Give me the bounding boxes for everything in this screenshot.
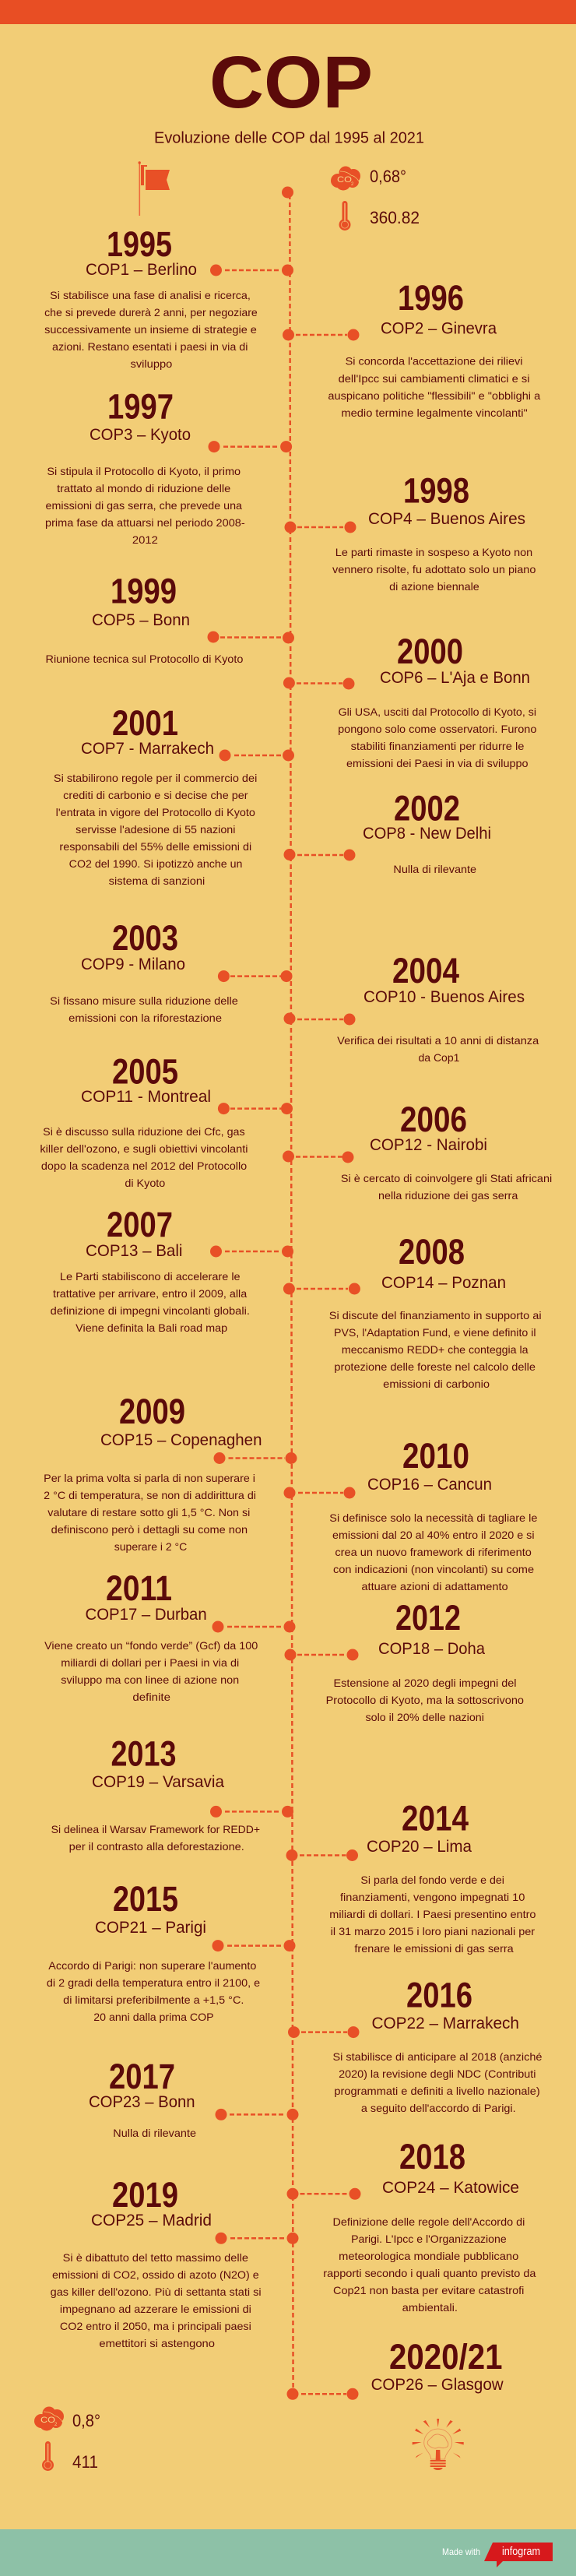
event 2006: COP12 - Nairobi	[370, 1136, 487, 1154]
event 2008: protezione delle foreste nel calcolo delle	[334, 1360, 536, 1373]
event 1998	[285, 471, 536, 593]
event 2017	[89, 2057, 299, 2139]
event 2010: crea un nuovo framework di riferimento	[335, 1546, 532, 1558]
event 2001: responsabili del 55% delle emissioni di	[59, 840, 251, 853]
event 2000: emissioni dei Paesi in via di sviluppo	[346, 757, 529, 769]
event 2015: Accordo di Parigi: non superare l'aumento	[48, 1959, 257, 1972]
year 2006: 2006	[400, 1100, 467, 1139]
event 1996: auspicano politiche "flessibili" e "obblighi a	[328, 389, 540, 402]
event 2008: Si discute del finanziamento in supporto ai	[329, 1309, 542, 1321]
event 2008: COP14 – Poznan	[381, 1274, 506, 1292]
event 2014: miliardi di dollari. I Paesi presentino entro	[329, 1908, 536, 1920]
year 2017: 2017	[109, 2057, 175, 2096]
event 2018: Cop21 non basta per evitare catastrofi	[333, 2284, 524, 2296]
year 2001: 2001	[112, 703, 178, 743]
event 2014: il 31 marzo 2015 i loro piani nazionali per	[331, 1925, 535, 1937]
event 2019: CO2 entro il 2050, ma i principali paesi	[60, 2320, 251, 2332]
event 2014: Si parla del fondo verde e dei	[360, 1874, 504, 1886]
event 1996	[283, 278, 540, 419]
subtitle: Evoluzione delle COP dal 1995 al 2021	[154, 129, 424, 146]
event 2019: emettitori si astengono	[99, 2337, 215, 2349]
event 1995: che si prevede durerà 2 anni, per negoziare	[44, 306, 258, 318]
event 2010: COP16 – Cancun	[367, 1476, 492, 1494]
event 2014: COP20 – Lima	[367, 1838, 472, 1856]
event 1999: COP5 – Bonn	[92, 611, 190, 629]
year 2015: 2015	[113, 1879, 178, 1919]
event 2016	[288, 1975, 543, 2114]
event 2010: con indicazioni (non vincolanti) su come	[333, 1563, 534, 1575]
event 1998: COP4 – Buenos Aires	[368, 510, 525, 528]
year 2011: 2011	[106, 1568, 172, 1608]
year 2005: 2005	[112, 1051, 178, 1091]
year 2000: 2000	[397, 632, 463, 671]
event 1999: Riunione tecnica sul Protocollo di Kyoto	[45, 653, 244, 665]
event 2013: Si delinea il Warsav Framework for REDD+	[51, 1823, 260, 1835]
event 2000: COP6 – L'Aja e Bonn	[380, 669, 530, 687]
year 2004: 2004	[392, 951, 459, 991]
event 2020/21	[286, 2337, 504, 2400]
year 2003: 2003	[112, 918, 178, 958]
year 2012: 2012	[395, 1598, 461, 1638]
event 2009: 2 °C di temperatura, se non di addirittura di	[44, 1489, 256, 1501]
event 2014: frenare le emissioni di gas serra	[354, 1942, 514, 1955]
event 2007: trattative per arrivare, entro il 2009, alla	[53, 1287, 247, 1300]
event 2012	[285, 1598, 524, 1723]
icon: light bulb with brain	[413, 2419, 464, 2470]
event 1998: di azione biennale	[389, 580, 479, 593]
event 2005: Si è discusso sulla riduzione dei Cfc, gas	[43, 1125, 245, 1138]
event 1995: Si stabilisce una fase di analisi e ricerca,	[50, 289, 251, 301]
event 2018: meteorologica mondiale pubblicano	[339, 2250, 519, 2262]
year 2018: 2018	[399, 2137, 465, 2177]
year 2007: 2007	[107, 1205, 173, 1244]
event 2006	[283, 1100, 552, 1202]
event 2016: Si stabilisce di anticipare al 2018 (anziché	[333, 2050, 543, 2063]
event 2001: sistema di sanzioni	[109, 875, 205, 887]
event 2001: crediti di carbonio e si decise che per	[63, 789, 248, 801]
event 2004	[283, 951, 539, 1064]
timeline axis	[282, 187, 293, 2391]
event 1997: Si stipula il Protocollo di Kyoto, il primo	[47, 465, 241, 477]
event 2011: COP17 – Durban	[86, 1606, 207, 1624]
event 2014: finanziamenti, vengono impegnati 10	[340, 1891, 525, 1903]
event 1997: trattato al mondo di riduzione delle	[57, 482, 231, 494]
event 2013: COP19 – Varsavia	[92, 1773, 224, 1791]
title: COP	[209, 41, 373, 124]
event 2006: Si è cercato di coinvolgere gli Stati africani	[341, 1172, 552, 1184]
icon: CO2 cloud bottom	[34, 2406, 64, 2431]
year 2010: 2010	[402, 1436, 469, 1476]
event 1998: vennero risolte, fu adottato solo un piano	[332, 563, 536, 575]
year 1998: 1998	[403, 471, 469, 511]
event 2012: solo il 20% delle nazioni	[366, 1711, 484, 1723]
event 2019: emissioni di CO2, ossido di azoto (N2O) e	[52, 2268, 259, 2281]
year 2019: 2019	[112, 2175, 178, 2215]
icon: CO2 cloud: CO	[337, 175, 353, 185]
event 2008: PVS, l'Adaptation Fund, e viene definito il	[334, 1326, 536, 1339]
event 1995: COP1 – Berlino	[86, 261, 197, 279]
event 2019: COP25 – Madrid	[91, 2212, 212, 2229]
value: ppm 1995: 360.82	[370, 208, 420, 227]
event 2015: di 2 gradi della temperatura entro il 2100, e	[47, 1976, 260, 1989]
event 2010: attuare azioni di adattamento	[361, 1580, 508, 1592]
year 2014: 2014	[402, 1799, 469, 1839]
event 2001: Si stabilirono regole per il commercio dei	[54, 772, 257, 784]
event 2016: 2020) la revisione degli NDC (Contributi	[339, 2067, 536, 2080]
event 2009: valutare di restare sotto gli 1,5 °C. Non si	[47, 1506, 250, 1519]
event 1996: Si concorda l'accettazione dei rilievi	[346, 355, 523, 368]
event 2000: Gli USA, usciti dal Protocollo di Kyoto, si	[339, 706, 536, 718]
event 2000: pongono solo come osservatori. Furono	[338, 723, 537, 735]
event 2019	[51, 2175, 298, 2349]
event 2007: Viene definita la Bali road map	[76, 1321, 227, 1334]
made with: Made with	[442, 2546, 480, 2557]
event 2002: Nulla di rilevante	[393, 863, 476, 875]
event 2011	[44, 1568, 295, 1703]
value: temperature 1995: 0,68°	[370, 167, 406, 186]
event 2018: rapporti secondo i quali quanto previsto da	[323, 2267, 536, 2279]
event 2005: killer dell'ozono, e sugli obiettivi vincolanti	[40, 1142, 248, 1155]
year 2002: 2002	[394, 789, 460, 829]
event 2016: programmati e definiti a livello nazionale)	[334, 2085, 540, 2097]
event 2003: Si fissano misure sulla riduzione delle	[50, 994, 238, 1007]
event 1995	[44, 224, 293, 370]
event 2014	[286, 1799, 536, 1955]
event 2009	[44, 1392, 297, 1553]
year 1997: 1997	[107, 386, 174, 427]
event 2005: COP11 - Montreal	[81, 1088, 211, 1106]
event 2003: emissioni con la riforestazione	[68, 1012, 222, 1024]
event 2005: dopo la scadenza nel 2012 del Protocollo	[41, 1160, 247, 1172]
event 2019: Si è dibattuto del tetto massimo delle	[63, 2251, 248, 2264]
event 2017: COP23 – Bonn	[89, 2093, 195, 2111]
event 2013: per il contrasto alla deforestazione.	[69, 1840, 244, 1853]
event 2006: nella riduzione dei gas serra	[378, 1189, 518, 1202]
event 2001: servisse l'adesione di 55 nazioni	[76, 823, 235, 836]
year 1995: 1995	[107, 224, 172, 264]
event 2011: sviluppo ma con linee di azione non	[61, 1673, 239, 1686]
event 2013	[51, 1733, 293, 1853]
event 2001: l'entrata in vigore del Protocollo di Kyoto	[56, 806, 255, 818]
event 2011: Viene creato un “fondo verde” (Gcf) da 100	[44, 1639, 258, 1652]
event 2018: ambientali.	[402, 2301, 458, 2314]
event 2019: gas killer dell'ozono. Più di settanta stati si	[51, 2286, 262, 2298]
event 2010	[283, 1436, 538, 1592]
event 2003: COP9 - Milano	[81, 955, 185, 973]
event 2011: miliardi di dollari per i Paesi in via di	[61, 1656, 239, 1669]
event 1995: azioni. Restano esentati i paesi in via di	[52, 340, 248, 353]
event 2016: a seguito dell'accordo di Parigi.	[361, 2102, 516, 2114]
event 2000: stabiliti finanziamenti per ridurre le	[351, 740, 525, 752]
year 2013: 2013	[111, 1733, 176, 1774]
event 2009: COP15 – Copenaghen	[100, 1431, 262, 1449]
event 2001	[54, 703, 294, 887]
event 1999	[45, 571, 294, 665]
event 2012: Protocollo di Kyoto, ma la sottoscrivono	[326, 1694, 524, 1706]
event 2010: emissioni dal 20 al 40% entro il 2020 e si	[332, 1529, 534, 1541]
event 2002: COP8 - New Delhi	[363, 825, 491, 843]
event 2015: COP21 – Parigi	[95, 1919, 206, 1937]
event 2004: COP10 - Buenos Aires	[364, 988, 525, 1006]
event 2008	[283, 1232, 542, 1390]
event 2010: Si definisce solo la necessità di tagliare le	[329, 1511, 538, 1524]
event 2005	[40, 1051, 293, 1189]
event 1997	[45, 386, 292, 546]
event 2012: Estensione al 2020 degli impegni del	[333, 1677, 517, 1689]
year 2009: 2009	[119, 1392, 185, 1431]
event 2009: definiscono però i dettagli su come non	[51, 1523, 248, 1536]
value: temperature 2021: 0,8°	[72, 2411, 100, 2430]
footer	[0, 2529, 576, 2576]
event 2018: Definizione delle regole dell'Accordo di	[333, 2215, 525, 2228]
event 2018: Parigi. L'Ipcc e l'Organizzazione	[351, 2233, 507, 2245]
event 2004: da Cop1	[419, 1051, 460, 1064]
event 2007: definizione di impegni vincolanti globali.	[51, 1304, 250, 1317]
event 1997: 2012	[132, 533, 158, 546]
infogram logo	[484, 2543, 553, 2567]
event 2009: Per la prima volta si parla di non superare i	[44, 1472, 255, 1484]
top bar	[0, 0, 576, 24]
icon: thermometer	[339, 201, 350, 231]
event 2020/21: COP26 – Glasgow	[371, 2376, 504, 2394]
icon: CO2 cloud bottom: CO	[40, 2416, 56, 2425]
event 1996: dell'Ipcc sui cambiamenti climatici e si	[339, 372, 529, 385]
event 1996: medio termine legalmente vincolanti"	[341, 406, 528, 419]
event 2001: COP7 - Marrakech	[81, 740, 214, 758]
event 2015: 20 anni dalla prima COP	[93, 2011, 214, 2023]
event 2005: di Kyoto	[125, 1177, 166, 1189]
event 2015	[47, 1879, 296, 2023]
event 1995: sviluppo	[131, 357, 173, 370]
event 2012: COP18 – Doha	[378, 1640, 485, 1658]
icon: CO2 cloud bottom: 2	[54, 2423, 58, 2427]
event 2011: definite	[132, 1691, 170, 1703]
event 2007: COP13 – Bali	[86, 1242, 182, 1260]
event 2007	[51, 1205, 293, 1334]
event 1996: COP2 – Ginevra	[381, 320, 497, 338]
event 1998: Le parti rimaste in sospeso a Kyoto non	[335, 546, 532, 558]
event 2016: COP22 – Marrakech	[372, 2015, 519, 2032]
event 2015: di limitarsi preferibilmente a +1,5 °C.	[63, 1994, 244, 2006]
event 2017: Nulla di rilevante	[113, 2127, 196, 2139]
year 1996: 1996	[398, 278, 464, 318]
event 1995: successivamente un insieme di strategie e	[44, 323, 257, 336]
event 2002	[283, 789, 491, 875]
event 1997: COP3 – Kyoto	[90, 426, 191, 444]
event 2018: COP24 – Katowice	[382, 2179, 519, 2197]
year 2016: 2016	[406, 1975, 472, 2015]
year 2020/21: 2020/21	[389, 2337, 503, 2377]
event 1997: emissioni di gas serra, che prevede una	[45, 499, 242, 512]
icon: thermometer bottom	[42, 2441, 54, 2471]
icon: flag	[139, 161, 170, 216]
event 2009: superare i 2 °C	[114, 1540, 187, 1553]
event 2018	[286, 2137, 536, 2314]
event 2008: emissioni di carbonio	[383, 1378, 490, 1390]
event 2007: Le Parti stabiliscono di accelerare le	[60, 1270, 241, 1283]
event 2001: CO2 del 1990. Si ipotizzò anche un	[69, 857, 242, 870]
event 2000	[283, 632, 537, 769]
event 2003	[50, 918, 292, 1024]
icon: CO2 cloud: 2	[351, 182, 354, 187]
value: ppm 2021: 411	[72, 2452, 98, 2472]
event 2019: impegnano ad azzerare le emissioni di	[60, 2303, 251, 2315]
event 2008: meccanismo REDD+ che conteggia la	[342, 1343, 529, 1356]
infogram logo: infogram	[502, 2545, 540, 2558]
year 1999: 1999	[111, 571, 177, 611]
icon: CO2 cloud	[331, 167, 360, 190]
year 2008: 2008	[399, 1232, 465, 1272]
event 2004: Verifica dei risultati a 10 anni di distanza	[337, 1034, 539, 1047]
event 1997: prima fase da attuarsi nel periodo 2008-	[45, 516, 245, 529]
